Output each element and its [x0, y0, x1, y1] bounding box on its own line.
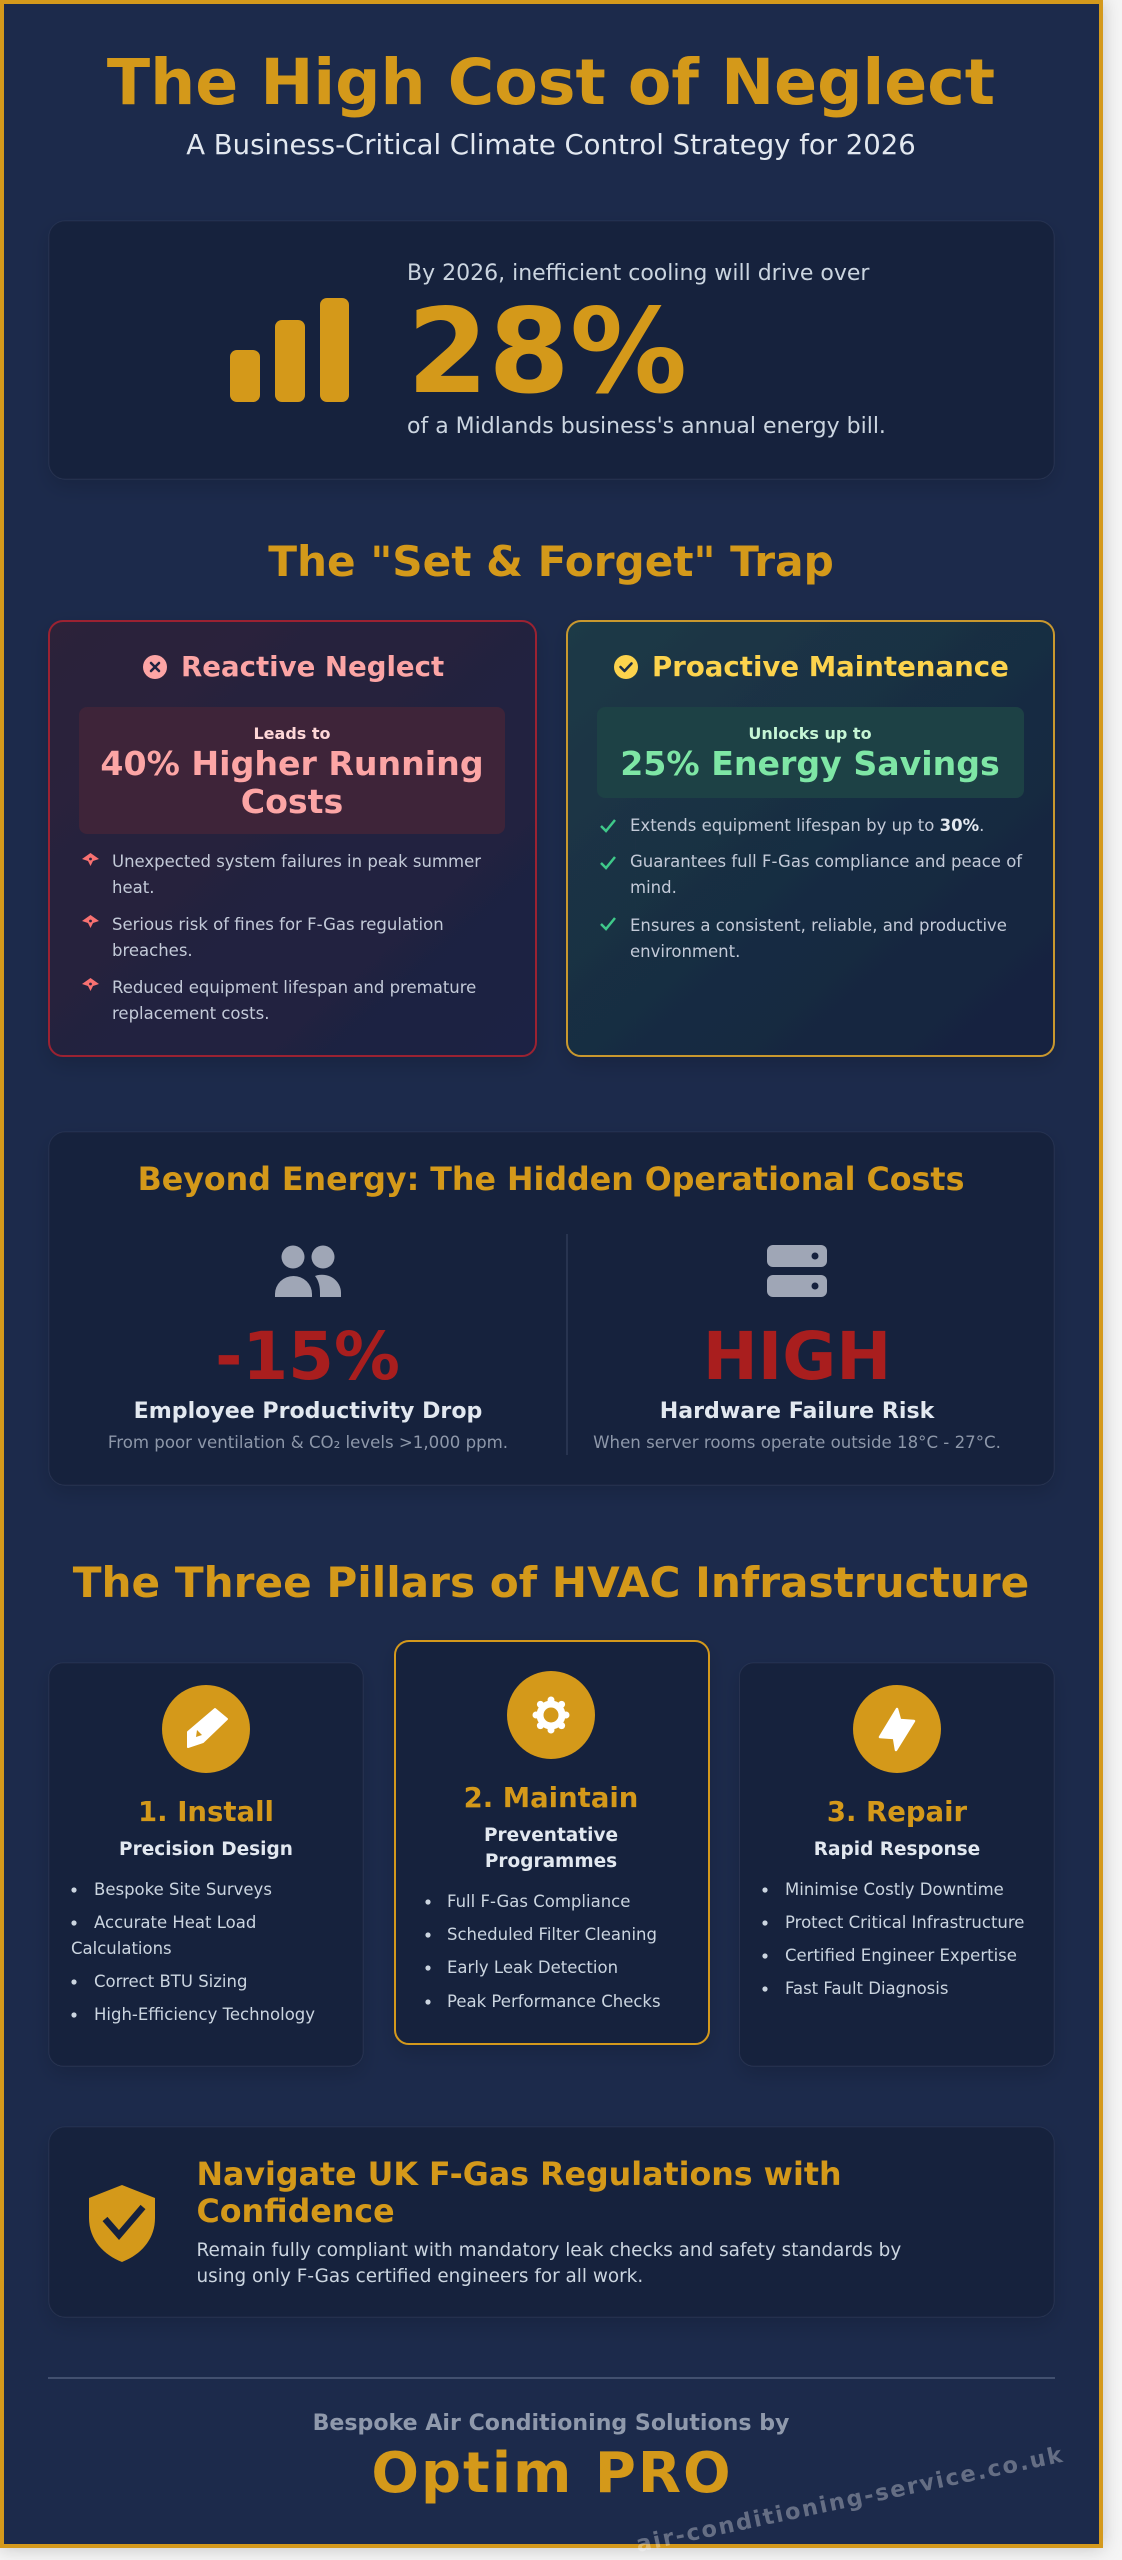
pillar subtitle: Precision Design [119, 1839, 293, 1860]
callout: energy savings [597, 707, 1024, 798]
list: maintenance benefits: Extends equipment lifespan by up to 30%. [630, 816, 984, 835]
panel: install [49, 1663, 363, 2066]
statistic: hardware: When server rooms operate outside 18°C - 27°C. [593, 1433, 1001, 1452]
pillar subtitle: Rapid Response [814, 1839, 980, 1860]
list: install: Correct BTU Sizing [94, 1972, 247, 1991]
statistic text [407, 261, 886, 439]
list: neglect consequences: heat. [112, 878, 154, 897]
compliance text: Navigate UK F-Gas Regulations with [196, 2157, 842, 2193]
footer: Bespoke Air Conditioning Solutions by [313, 2410, 789, 2436]
panel heading: Proactive Maintenance [652, 650, 1009, 683]
compliance text [196, 2157, 901, 2287]
pillar subtitle: Preventative [484, 1825, 618, 1846]
list: neglect consequences: Reduced equipment lifespan and premature [112, 978, 476, 997]
statistic text: of a Midlands business's annual energy bill. [407, 414, 886, 439]
icon: shield [89, 2185, 155, 2262]
pillar title: 3. Repair [827, 1796, 968, 1828]
callout: running costs [79, 707, 505, 834]
panel: proactive maintenance [567, 621, 1054, 1056]
list: repair: Fast Fault Diagnosis [785, 1979, 948, 1998]
list: maintain: Peak Performance Checks [447, 1992, 661, 2011]
subtitle: A Business-Critical Climate Control Strategy for 2026 [186, 129, 916, 161]
panel heading: Beyond Energy: The Hidden Operational Costs [138, 1162, 964, 1198]
heading: set and forget trap: The "Set & Forget" Trap [268, 537, 834, 586]
list: maintenance benefits [601, 816, 1023, 961]
callout: running costs: 40% Higher Running [100, 744, 484, 783]
list: maintenance benefits: environment. [630, 942, 740, 961]
icon: cross circle [143, 655, 167, 679]
icon: people [275, 1246, 341, 1297]
pillar subtitle [484, 1825, 618, 1872]
callout: energy savings: 25% Energy Savings [620, 744, 1000, 783]
list: install: Accurate Heat Load [94, 1913, 256, 1932]
list: install: High-Efficiency Technology [94, 2005, 315, 2024]
panel: reactive neglect [49, 621, 536, 1056]
pillar subtitle: Programmes [485, 1851, 617, 1872]
statistic: hardware [593, 1318, 1001, 1452]
list: maintain: Full F-Gas Compliance [447, 1892, 630, 1911]
panel heading: Reactive Neglect [181, 650, 444, 683]
title: The High Cost of Neglect [107, 45, 995, 119]
panel: maintain [395, 1641, 709, 2044]
compliance text: Confidence [196, 2194, 395, 2230]
statistic: productivity [108, 1318, 508, 1452]
list: install: Bespoke Site Surveys [94, 1880, 272, 1899]
panel: repair [740, 1663, 1054, 2066]
panel: f-gas compliance [49, 2127, 1054, 2317]
statistic text: 28% [407, 283, 687, 420]
list: repair: Minimise Costly Downtime [785, 1880, 1004, 1899]
list: repair: Protect Critical Infrastructure [785, 1913, 1024, 1932]
pillar title: 1. Install [138, 1796, 274, 1828]
watermark: air-conditioning-service.co.uk [634, 2442, 1067, 2558]
list: neglect consequences: replacement costs. [112, 1004, 269, 1023]
footer [313, 2410, 789, 2506]
statistic: productivity: -15% [215, 1318, 400, 1395]
icon: lightning bolt [853, 1685, 941, 1773]
statistic: hardware: HIGH [703, 1318, 891, 1395]
list: maintenance benefits: Guarantees full F-Gas compliance and peace of [630, 852, 1023, 871]
list: maintenance benefits: Ensures a consistent, reliable, and productive [630, 916, 1007, 935]
icon: bar chart [230, 298, 349, 402]
statistic: productivity: From poor ventilation & CO₂ levels >1,000 ppm. [108, 1433, 508, 1452]
list: maintenance benefits: mind. [630, 878, 677, 897]
statistic: productivity: Employee Productivity Drop [134, 1398, 482, 1424]
callout: running costs: Costs [241, 782, 343, 821]
statistic: hardware: Hardware Failure Risk [660, 1398, 936, 1424]
list: install [71, 1880, 315, 2024]
icon: check circle [614, 655, 638, 679]
list: install: Calculations [71, 1939, 172, 1958]
panel: headline statistic [49, 221, 1054, 479]
list: maintain: Early Leak Detection [447, 1958, 618, 1977]
statistic text: By 2026, inefficient cooling will drive over [407, 261, 870, 286]
icon: server [767, 1245, 827, 1297]
list: neglect consequences: Unexpected system failures in peak summer [112, 852, 481, 871]
callout: energy savings: Unlocks up to [748, 724, 872, 743]
list: repair [762, 1880, 1024, 1998]
list: neglect consequences: Serious risk of fines for F-Gas regulation [112, 915, 444, 934]
footer: Optim PRO [371, 2441, 733, 2506]
icon: pencil [162, 1685, 250, 1773]
list: maintain: Scheduled Filter Cleaning [447, 1925, 657, 1944]
panel: hidden operational costs [49, 1132, 1054, 1485]
pillar title: 2. Maintain [464, 1782, 638, 1814]
callout: running costs: Leads to [253, 724, 331, 743]
list: neglect consequences [82, 852, 481, 1023]
heading: three pillars: The Three Pillars of HVAC Infrastructure [73, 1558, 1029, 1607]
compliance text: using only F-Gas certified engineers for all work. [196, 2266, 643, 2287]
list: neglect consequences: breaches. [112, 941, 193, 960]
icon: gear [507, 1671, 595, 1759]
list: maintain [425, 1892, 661, 2011]
list: repair: Certified Engineer Expertise [785, 1946, 1017, 1965]
compliance text: Remain fully compliant with mandatory leak checks and safety standards by [196, 2240, 901, 2261]
